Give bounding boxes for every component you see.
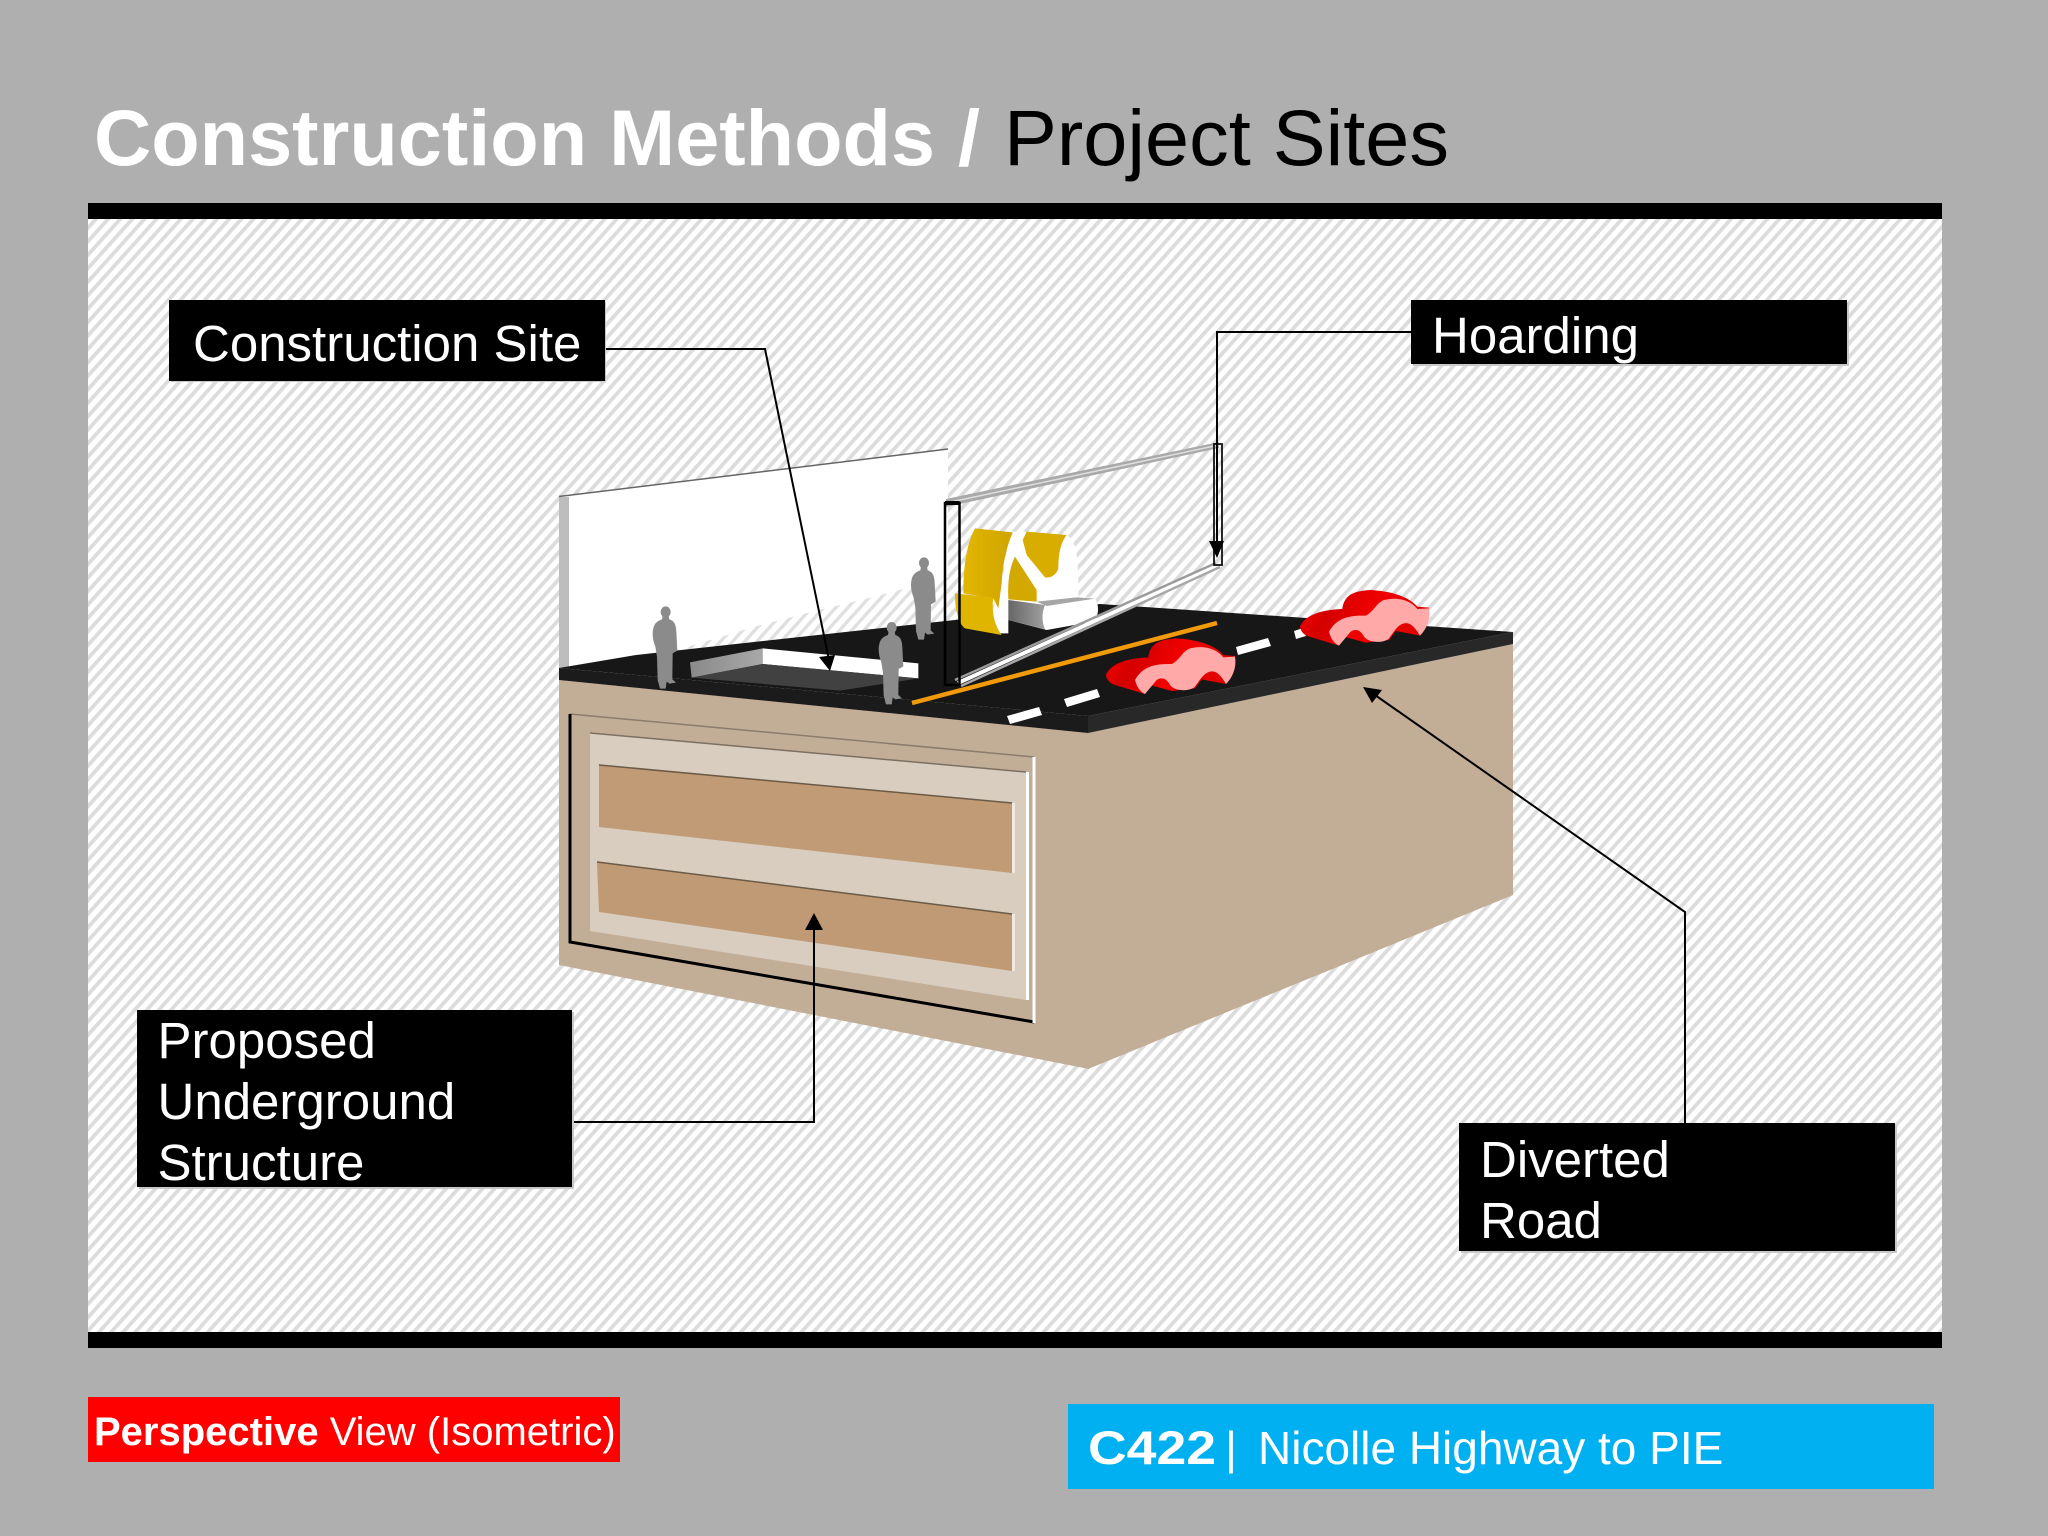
blue project tag: C422 — [1088, 1421, 1216, 1474]
orange centre line — [912, 623, 1217, 703]
car far — [1300, 590, 1429, 646]
panel: hatched diagram area — [88, 203, 1942, 1348]
people silhouettes — [653, 557, 936, 704]
leader arrow: diverted road — [1363, 687, 1685, 1123]
label: proposed underground structure: Structure — [158, 1134, 364, 1191]
excavation block: side faces — [559, 644, 1513, 1069]
white lane dashes — [1007, 628, 1306, 724]
leader arrow: hoarding — [1209, 332, 1411, 558]
hoarding frame — [945, 442, 1222, 686]
title: Project Sites — [1004, 93, 1449, 182]
label: construction site — [169, 300, 606, 382]
blue project tag: Nicolle Highway to PIE — [1258, 1422, 1723, 1474]
blue project tag: | — [1225, 1422, 1237, 1474]
red view tag: Perspective View (Isometric) — [94, 1410, 616, 1454]
cars — [1106, 590, 1429, 694]
lower level — [597, 862, 1012, 971]
person left — [653, 606, 677, 689]
back wall of site — [559, 449, 948, 680]
upper level — [599, 765, 1012, 873]
person front — [879, 622, 903, 704]
label: proposed underground structure: Underground — [158, 1073, 455, 1130]
label: hoarding — [1411, 300, 1849, 366]
excavator — [955, 528, 1098, 635]
proposed underground structure — [570, 714, 1034, 1023]
title: / — [958, 93, 980, 182]
title — [94, 93, 1449, 182]
red view tag — [88, 1397, 620, 1462]
blue project tag — [1068, 1404, 1934, 1489]
car near — [1106, 638, 1235, 694]
excavation pit — [690, 648, 918, 691]
label: diverted road: Diverted — [1480, 1131, 1670, 1188]
label: construction site: Construction Site — [193, 315, 581, 372]
leader arrow: proposed underground structure — [572, 913, 823, 1122]
label: diverted road — [1459, 1123, 1897, 1253]
label: hoarding: Hoarding — [1432, 307, 1639, 364]
road deck — [559, 604, 1513, 733]
title: Construction Methods — [94, 93, 935, 182]
label: diverted road: Road — [1480, 1192, 1602, 1249]
leader arrow: construction site — [605, 349, 835, 671]
road markings — [912, 623, 1306, 724]
label: proposed underground structure: Proposed — [158, 1012, 376, 1069]
label: proposed underground structure — [137, 1010, 574, 1191]
person rear — [911, 557, 936, 640]
